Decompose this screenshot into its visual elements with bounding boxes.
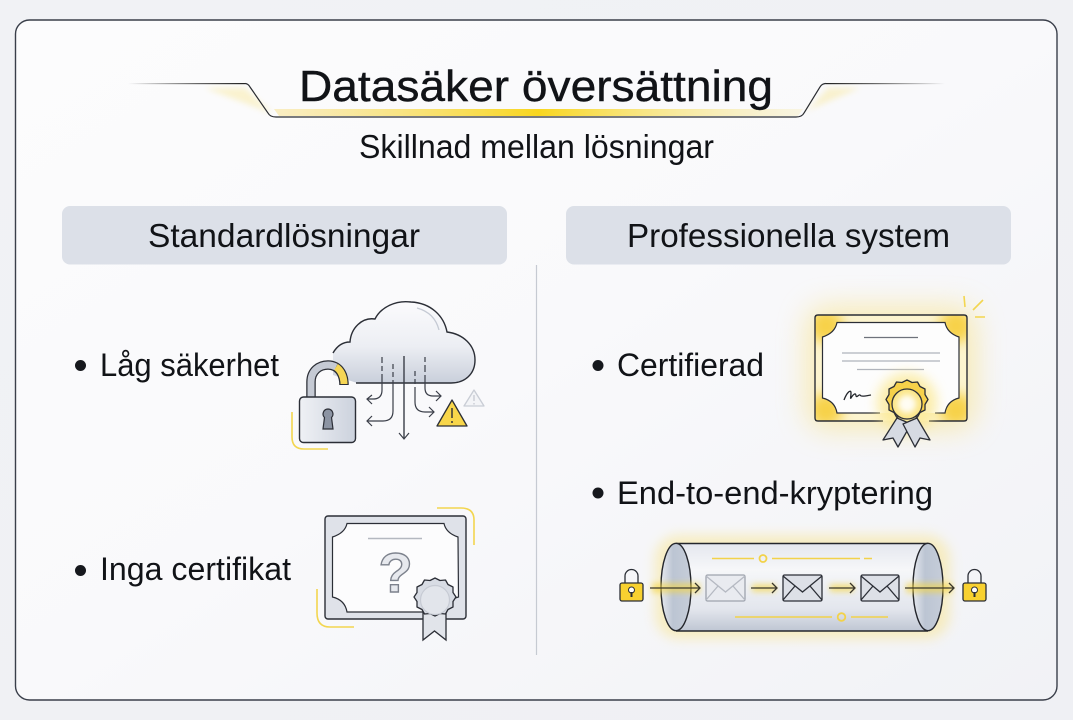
question mark: ? xyxy=(378,541,413,604)
bullet: Certifierad: Certifierad xyxy=(617,347,764,383)
tunnel body xyxy=(676,544,928,631)
icon: gold certificate xyxy=(806,296,985,447)
tunnel glow xyxy=(655,535,950,639)
arrow glows xyxy=(652,583,952,593)
title: Datasäker översättning xyxy=(299,62,773,111)
envelope xyxy=(861,575,899,601)
bullet: End-to-end-kryptering: End-to-end-kryptering xyxy=(617,475,933,511)
bullet: Inga certifikat: Inga certifikat xyxy=(100,551,291,587)
title banner decoration xyxy=(128,83,945,117)
envelope xyxy=(783,575,822,601)
column divider xyxy=(536,265,538,655)
lock body xyxy=(300,397,356,442)
icon: cloud with open lock and warning xyxy=(292,302,484,449)
subtitle: Skillnad mellan lösningar xyxy=(359,128,714,165)
data leak arrows xyxy=(367,356,441,439)
seal ribbons xyxy=(883,418,911,447)
left lock xyxy=(620,570,643,601)
signature xyxy=(844,391,871,400)
heading: Standardlösningar xyxy=(62,206,507,264)
yellow corners xyxy=(437,508,474,545)
ribbon xyxy=(423,612,446,640)
seal glow xyxy=(877,373,937,433)
rosette xyxy=(414,578,456,616)
icon: encrypted tunnel xyxy=(620,535,986,639)
right lock xyxy=(963,570,986,601)
heading: Standardlösningar: Standardlösningar xyxy=(148,217,420,254)
arrows xyxy=(650,583,954,593)
faded warning xyxy=(464,390,484,406)
cloud xyxy=(333,302,475,383)
icon: uncertified certificate xyxy=(317,508,474,640)
envelope faded xyxy=(706,575,745,601)
sparkle xyxy=(964,296,985,317)
shackle xyxy=(311,365,344,397)
warning triangle xyxy=(437,400,467,426)
heading: Professionella system xyxy=(566,206,1011,264)
heading: Professionella system: Professionella system xyxy=(627,217,950,254)
seal xyxy=(886,380,928,419)
yellow corner xyxy=(292,412,328,449)
bullet: Låg säkerhet: Låg säkerhet xyxy=(100,347,279,383)
top track xyxy=(712,555,888,621)
tunnel ends xyxy=(661,543,691,631)
